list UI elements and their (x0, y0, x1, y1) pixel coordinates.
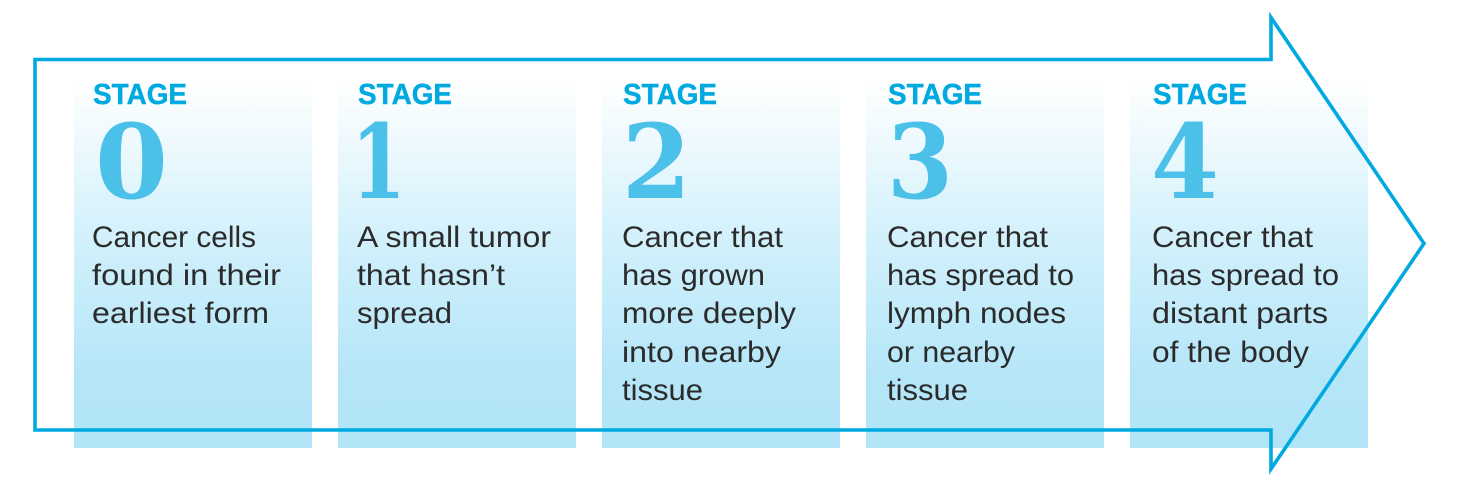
stage 1 label: STAGE (358, 79, 452, 111)
panel: stage 0 (74, 79, 312, 448)
stage 2 description: into nearby (622, 336, 781, 369)
panel: stage 3 (866, 79, 1104, 448)
stage 1 description (357, 221, 551, 330)
stage 1 background (338, 80, 576, 448)
stage 2 description (622, 221, 796, 407)
stage 0 description (92, 221, 281, 330)
stage 4 description: has spread to (1152, 259, 1339, 292)
stage 4 number: 4 (1151, 102, 1219, 223)
stage 3 label: STAGE (888, 79, 982, 111)
stage 2 number: 2 (622, 102, 691, 223)
stage 0 label: STAGE (93, 79, 187, 111)
stage 3 description: has spread to (887, 259, 1074, 292)
stage 0 description: Cancer cells (92, 221, 256, 254)
stage 0 background (74, 80, 312, 448)
stage 4 description: distant parts (1152, 297, 1328, 330)
stage 3 number: 3 (887, 102, 953, 223)
stage 2 description: tissue (622, 374, 703, 407)
stage 1 description: A small tumor (357, 221, 551, 254)
stage 1 description: spread (357, 297, 452, 330)
stage 1 description: that hasn’t (357, 259, 506, 292)
panel: stage 1 (338, 79, 576, 448)
stage 3 description: lymph nodes (887, 297, 1066, 330)
stage 4 description: of the body (1152, 336, 1309, 369)
stage 1 number: 1 (351, 102, 406, 223)
stage 3 description: tissue (887, 374, 968, 407)
stage 0 description: found in their (92, 259, 281, 292)
stage 0 number: 0 (95, 102, 168, 223)
stage 3 description: or nearby (887, 336, 1015, 369)
stage 2 description: has grown (622, 259, 765, 292)
stage 2 description: more deeply (622, 297, 796, 330)
panel: stage 4 (1130, 79, 1368, 448)
stage 4 description: Cancer that (1152, 221, 1314, 254)
stage 2 background (602, 80, 840, 448)
stage 3 background (866, 80, 1104, 448)
stage 4 label: STAGE (1153, 79, 1247, 111)
stage 2 label: STAGE (623, 79, 717, 111)
stage 3 description: Cancer that (887, 221, 1049, 254)
stage 2 description: Cancer that (622, 221, 784, 254)
panel: stage 2 (602, 79, 840, 448)
stage 4 background (1130, 80, 1368, 448)
stage 0 description: earliest form (92, 297, 269, 330)
stage 3 description (887, 221, 1074, 407)
stage 4 description (1152, 221, 1339, 369)
